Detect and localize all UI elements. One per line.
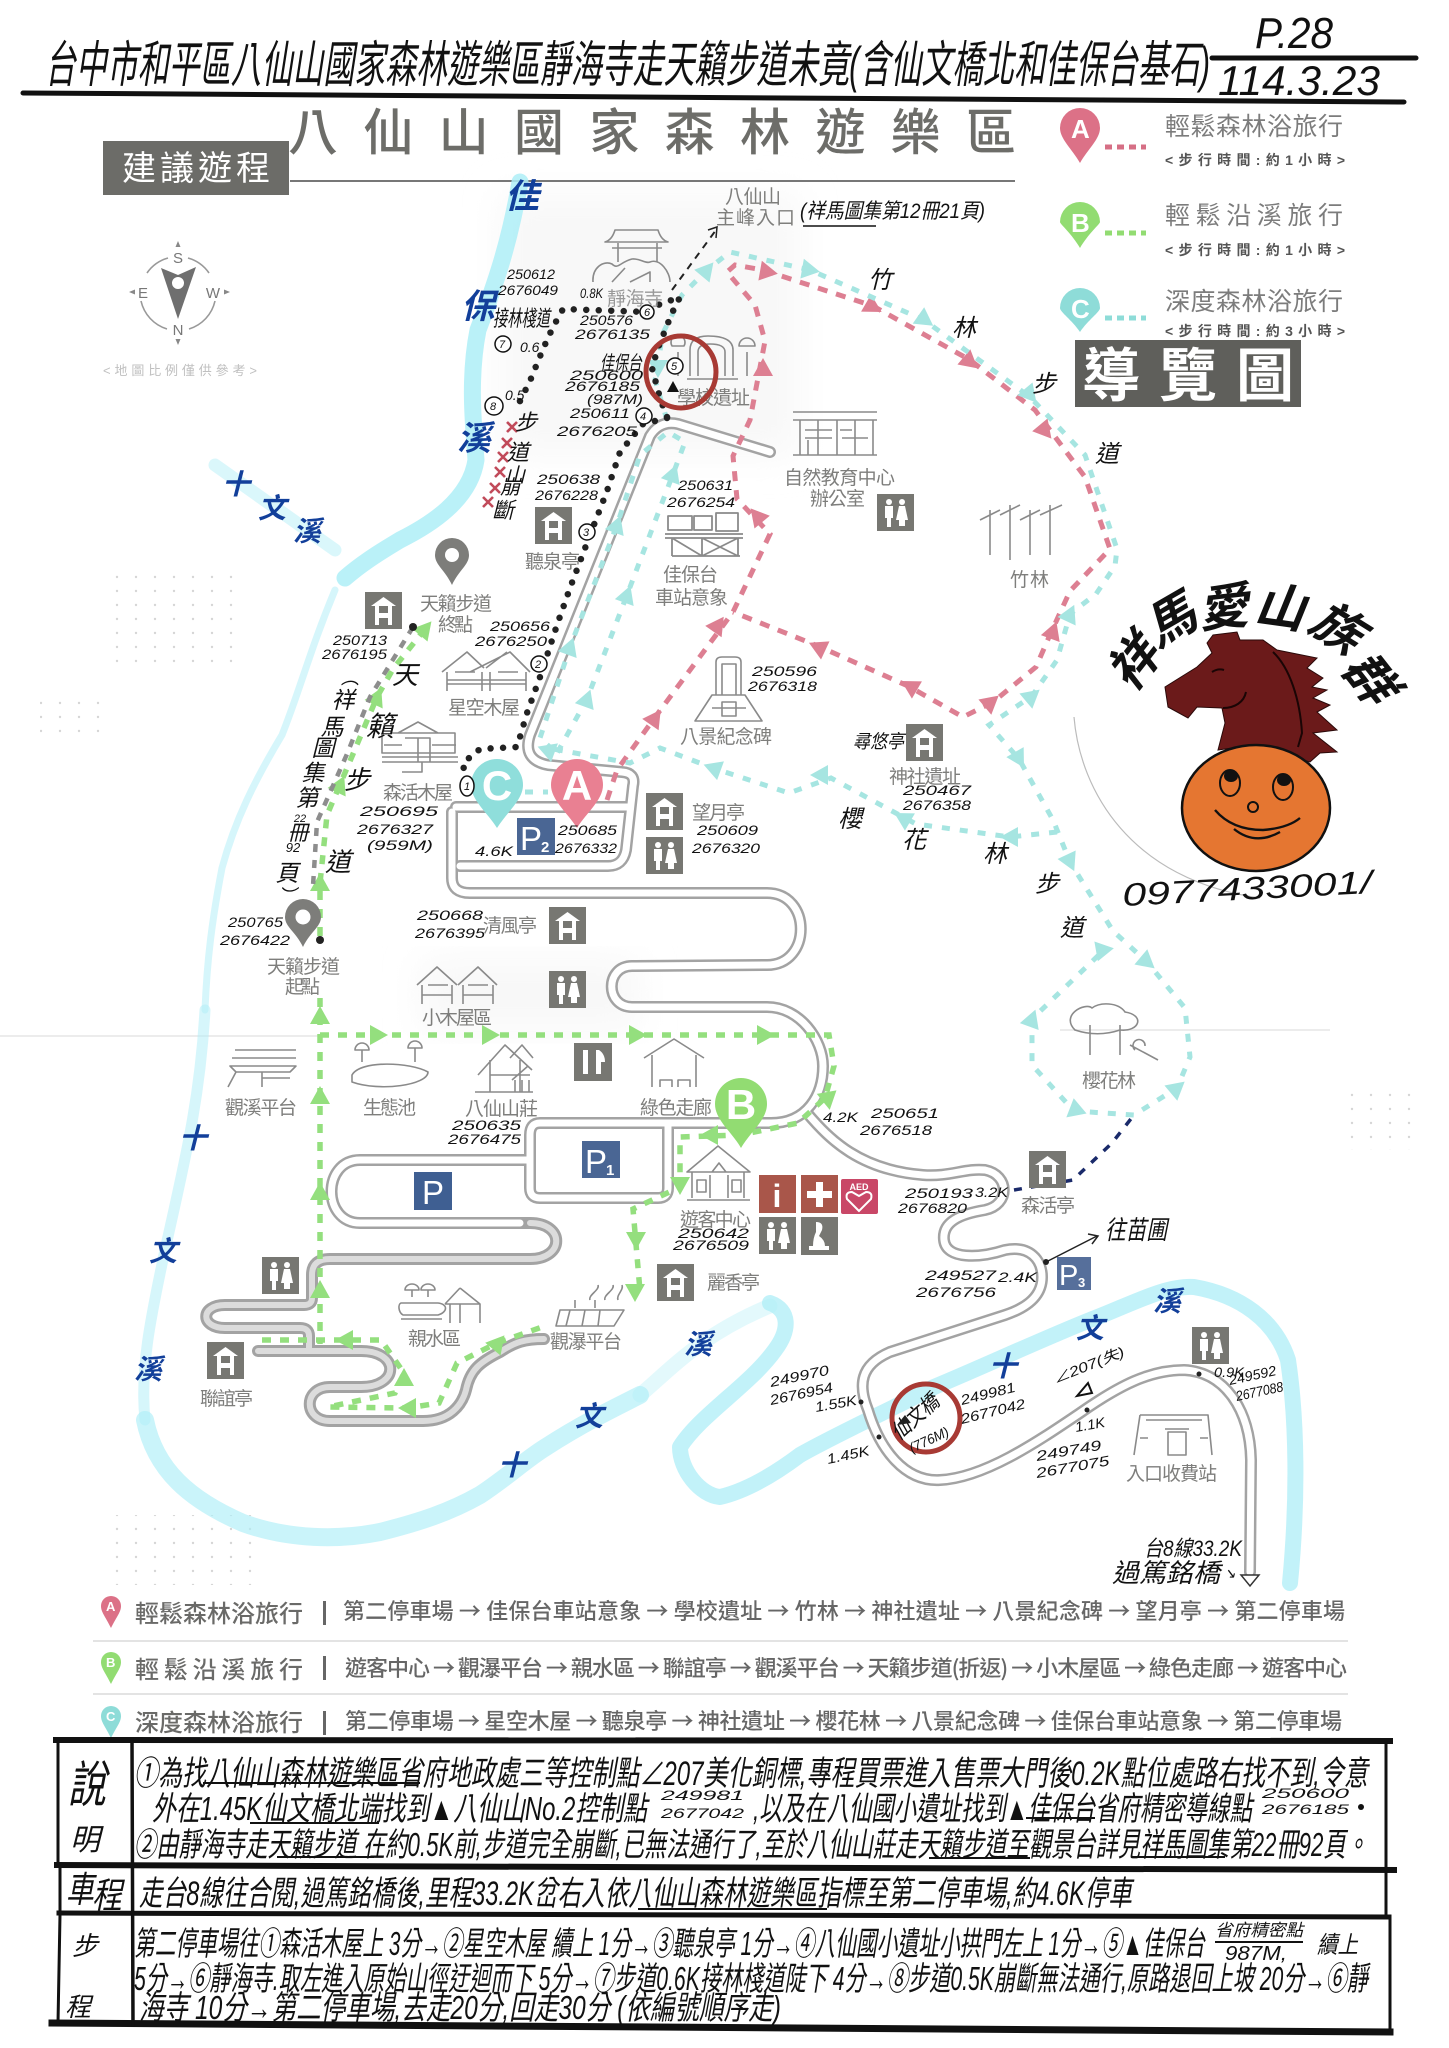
illustration: visitor center <box>687 1146 750 1200</box>
legend B: <步行時間:約1小時> <box>1165 242 1345 258</box>
map labels: 八景紀念碑 <box>680 725 772 748</box>
illustration: nature education center <box>793 412 877 455</box>
row label: notes: 明 <box>70 1824 104 1857</box>
roads <box>206 423 1251 1572</box>
road end arrow <box>1241 1575 1259 1586</box>
handwritten notes: coordinates: 250638 <box>536 471 600 487</box>
handwritten notes: coordinates: 1.55K <box>814 1392 859 1415</box>
handwritten notes: coordinates: 2676395 <box>414 925 485 941</box>
route row A <box>93 1594 1348 1641</box>
pavilion and restroom icons <box>207 494 1229 1379</box>
map labels: 起點 <box>285 976 320 998</box>
map labels <box>200 186 1217 1485</box>
handwritten vertical notes: 第 <box>296 785 322 811</box>
handwritten vertical notes: 櫻 <box>838 806 865 833</box>
pin C <box>471 759 523 828</box>
grey pin: trail start <box>285 899 321 947</box>
map labels: 八仙山 <box>725 186 781 208</box>
waypoint numerals: 6 <box>644 307 651 319</box>
handwritten notes: coordinates: 0.9K <box>1214 1364 1245 1380</box>
map labels: 觀溪平台 <box>225 1097 297 1119</box>
logo text arc: 族 <box>1300 591 1379 669</box>
handwritten vertical notes: 斷 <box>492 498 517 523</box>
handwritten notes: coordinates: 250576 <box>579 312 633 328</box>
handwritten notes: coordinates: 2676254 <box>666 494 735 510</box>
map labels: 聯誼亭 <box>200 1388 253 1410</box>
notes text: 249981 <box>659 1787 744 1803</box>
map labels: 主峰入口 <box>716 207 795 229</box>
route row B: B <box>106 1655 115 1670</box>
river names: 溪 <box>457 420 496 458</box>
handwritten notes: coordinates: 250651 <box>870 1105 939 1121</box>
pin B: B <box>726 1081 756 1128</box>
logo text arc: 山 <box>1251 577 1312 640</box>
map labels: 生態池 <box>363 1097 416 1119</box>
handwritten notes: coordinates: 250695 <box>358 803 438 819</box>
handwritten vertical notes: 馬 <box>320 714 346 740</box>
map labels: 神社遺址 <box>889 766 961 788</box>
compass: N <box>173 322 183 339</box>
compass: E <box>138 285 148 302</box>
handwritten notes: coordinates: 2676049 <box>497 282 558 298</box>
compass: W <box>206 285 221 302</box>
river names: 溪 <box>134 1354 166 1385</box>
red crosses: broken trail <box>483 422 517 507</box>
river names: 保 <box>461 288 499 326</box>
page number handwritten: P.28 <box>1255 9 1333 58</box>
logo text arc: 群 <box>1332 641 1412 721</box>
parking P2: 2 <box>541 839 549 856</box>
pink route A <box>607 261 1110 800</box>
illustrations <box>228 230 1212 1455</box>
handwritten notes: coordinates: 249981 <box>958 1379 1017 1408</box>
map labels: 終點 <box>438 614 473 636</box>
handwritten vertical notes: 92 <box>286 840 301 855</box>
route row A: 第二停車場 → 佳保台車站意象 → 學校遺址 → 竹林 → 神社遺址 → 八景紀念碑 → 望月亭 → 第二停車場 <box>343 1594 1345 1626</box>
pin B <box>715 1078 767 1148</box>
illustration: forest cabin <box>382 722 458 772</box>
guide map box: 導覽圖 <box>1082 344 1294 409</box>
handwritten notes: coordinates: 2676509 <box>672 1237 749 1253</box>
row label: steps <box>65 1931 100 2022</box>
park name heading: 八仙山國家森林遊樂區 <box>288 93 1016 165</box>
legend B: 輕鬆沿溪旅行 <box>1165 202 1343 230</box>
pin C: C <box>482 762 512 809</box>
handwritten vertical notes: 山 <box>505 465 527 487</box>
river names: 文 <box>149 1236 181 1267</box>
row label: drive: 車 <box>66 1869 97 1910</box>
handwritten notes: coordinates: 250668 <box>416 907 483 923</box>
illustration: eco pond <box>352 1041 428 1087</box>
map labels: 森活木屋 <box>383 782 453 804</box>
handwritten vertical notes: ︵ <box>341 668 359 688</box>
handwritten notes: coordinates: 1.1K <box>1074 1414 1107 1435</box>
statue icon <box>801 1217 838 1255</box>
route row B: 輕鬆沿溪旅行 <box>135 1650 303 1685</box>
notes text: 外在1.45K仙文橋北端找到▲八仙山No.2控制點 <box>152 1790 650 1827</box>
river names: 十 <box>498 1450 529 1481</box>
handwritten notes: coordinates: 250193 <box>904 1185 973 1201</box>
parking P2 <box>517 818 555 857</box>
title rules <box>23 58 1416 102</box>
row label: notes: 說 <box>68 1757 111 1813</box>
map labels: 麗香亭 <box>707 1272 760 1294</box>
handwritten notes: coordinates: 2676820 <box>897 1200 967 1216</box>
handwritten vertical notes: 祥 <box>332 687 358 713</box>
route row C: C <box>106 1709 116 1724</box>
route row B: 遊客中心 → 觀瀑平台 → 親水區 → 聯誼亭 → 觀溪平台 → 天籟步道(折返) → 小木屋區 → 綠色走廊 → 遊客中心 <box>345 1651 1347 1683</box>
route row B <box>93 1650 1348 1694</box>
parking P3: 3 <box>1078 1275 1085 1290</box>
legend A: 輕鬆森林浴旅行 <box>1165 113 1343 141</box>
map labels: 綠色走廊 <box>640 1097 712 1119</box>
illustration: villa <box>475 1045 533 1092</box>
waypoint numerals: 5 <box>671 361 678 373</box>
handwritten vertical notes: 道 <box>507 440 532 465</box>
river names: 溪 <box>293 516 325 547</box>
map labels: 櫻花林 <box>1082 1070 1136 1092</box>
handwritten notes: coordinates: 2676332 <box>554 840 617 856</box>
notes text: 2676185 <box>1260 1801 1349 1817</box>
handwritten vertical notes: 步 <box>1032 371 1058 398</box>
river names: 溪 <box>684 1329 716 1360</box>
black dotted hike route <box>316 297 680 944</box>
row label: drive <box>66 1869 125 1916</box>
steps text: 987M, <box>1225 1943 1287 1965</box>
parking P3 <box>1057 1257 1091 1292</box>
map labels: 車站意象 <box>655 587 728 609</box>
handwritten notes: coordinates: 過篤銘橋 <box>1112 1558 1224 1588</box>
handwritten notes: coordinates: 250609 <box>696 822 758 838</box>
handwritten vertical notes: 尋悠亭 <box>853 731 907 753</box>
parking P2: P <box>520 820 542 857</box>
red circles on survey points <box>646 336 960 1452</box>
handwritten notes: coordinates: 2676205 <box>556 423 637 439</box>
map labels: 清風亭 <box>483 915 537 937</box>
suggested itinerary box <box>103 141 289 195</box>
handwritten notes: coordinates: 250631 <box>677 477 733 493</box>
handwritten vertical notes: 頁 <box>276 860 302 886</box>
handwritten vertical notes: ︶ <box>278 886 300 906</box>
handwritten notes: coordinates: 250611 <box>569 405 630 421</box>
handwritten vertical notes <box>276 267 1122 942</box>
phone number: 0977433001/ <box>1121 864 1377 913</box>
handwritten notes: coordinates: 250765 <box>227 914 283 930</box>
handwritten vertical notes: 250467 <box>902 782 973 798</box>
handwritten vertical notes: 步 <box>344 765 372 795</box>
legend C: C <box>1071 294 1090 324</box>
illustration: school arch <box>671 335 755 379</box>
handwritten notes: coordinates: 4.2K <box>823 1109 859 1125</box>
logo text arc: 祥 <box>1096 621 1176 701</box>
illustration: cherry trees <box>1070 1004 1158 1060</box>
river names: 文 <box>575 1401 607 1432</box>
map labels: 星空木屋 <box>448 697 520 719</box>
steps text: 海寺 10分→第二停車場,去走20分,回走30分 (依編號順序走) <box>139 1989 781 2026</box>
waypoint numerals: 7 <box>499 339 506 351</box>
handwritten notes: coordinates: 2676185 <box>564 378 640 394</box>
handwritten notes: coordinates: 249527 <box>923 1267 998 1283</box>
handwritten notes: coordinates: 4.6K <box>475 843 514 859</box>
green route B <box>262 615 840 1418</box>
parking P1: P <box>585 1143 607 1180</box>
info icon <box>759 1175 796 1214</box>
handwritten notes: coordinates: 250656 <box>489 618 550 634</box>
map labels: 聽泉亭 <box>525 551 580 573</box>
handwritten notes: coordinates: 2676518 <box>859 1122 932 1138</box>
parking P <box>414 1172 452 1211</box>
map labels: 遊客中心 <box>680 1209 751 1231</box>
waypoint numerals: 2 <box>534 659 541 671</box>
map labels: 天籟步道 <box>267 956 340 978</box>
handwritten notes: coordinates: 2677042 <box>958 1395 1027 1427</box>
map labels: 天籟步道 <box>420 593 492 615</box>
handwritten notes: coordinates: 250713 <box>332 632 387 648</box>
dark blue dashed road <box>1014 1115 1134 1190</box>
handwritten notes: coordinates: ∠207(失) <box>1050 1343 1127 1387</box>
handwritten vertical notes: 步 <box>515 410 539 435</box>
logo text arc: 馬 <box>1135 582 1210 658</box>
handwritten notes: coordinates: 2677088 <box>1233 1378 1285 1404</box>
handwritten notes: coordinates: 250635 <box>451 1117 521 1133</box>
notes text <box>134 1755 1370 1863</box>
handwritten vertical notes: 林 <box>952 315 979 342</box>
steps text: 續上 <box>1317 1932 1359 1959</box>
illustration: star cabins <box>442 652 530 691</box>
map labels: 森活亭 <box>1021 1195 1075 1217</box>
notes text: 250600 <box>1260 1785 1349 1801</box>
parking P1 <box>582 1141 620 1180</box>
waypoint numerals: 8 <box>490 401 497 413</box>
handwritten notes: coordinates: 2676954 <box>767 1379 834 1408</box>
handwritten notes: coordinates: 2676318 <box>747 678 817 694</box>
map labels: 竹林 <box>1010 569 1049 591</box>
route row C: 第二停車場 → 星空木屋 → 聽泉亭 → 神社遺址 → 櫻花林 → 八景紀念碑 → 佳保台車站意象 → 第二停車場 <box>345 1704 1342 1736</box>
legend A: A <box>1071 114 1090 144</box>
illustration: toll station <box>1134 1415 1212 1455</box>
first aid icon <box>801 1175 838 1213</box>
handwritten notes: coordinates: 佳保台 <box>600 353 643 375</box>
illustration: monument <box>695 657 762 721</box>
steps text: 省府精密點 <box>1215 1921 1305 1940</box>
handwritten notes: coordinates: 2676195 <box>321 646 387 662</box>
waypoint numerals: 1 <box>464 781 470 793</box>
waypoint numerals: 3 <box>583 527 590 539</box>
handwritten vertical notes: 天 <box>392 660 421 690</box>
handwritten notes: coordinates: 250685 <box>557 822 617 838</box>
row label: steps: 程 <box>65 1992 94 2022</box>
handwritten notes: coordinates: 249749 <box>1033 1437 1103 1464</box>
legend B <box>1060 202 1345 258</box>
info icon: i <box>773 1178 781 1214</box>
parking P: P <box>422 1174 444 1211</box>
handwritten notes: coordinates: 2676250 <box>474 633 547 649</box>
notes table frame <box>52 1740 1394 2032</box>
suggested itinerary box: 建議遊程 <box>122 150 270 188</box>
river names: 佳 <box>505 178 543 216</box>
handwritten notes: coordinates: 249592 <box>1226 1362 1278 1388</box>
legend C: 深度森林浴旅行 <box>1165 288 1343 316</box>
map labels: 靜海寺 <box>607 288 663 310</box>
handwritten notes: coordinates: 2.4K <box>997 1269 1038 1285</box>
handwritten vertical notes: 花 <box>902 827 929 854</box>
river names: 文 <box>1076 1313 1108 1344</box>
handwritten notes: coordinates: (祥馬圖集第12冊21頁) <box>800 200 985 223</box>
numbered route waypoints <box>460 305 683 796</box>
handwritten notes: coordinates: 2676422 <box>219 932 290 948</box>
compass <box>129 241 230 345</box>
handwritten notes: coordinates: (776M) <box>907 1423 951 1456</box>
route row A: A <box>106 1599 116 1614</box>
handwritten notes: coordinates <box>219 200 1285 1588</box>
handwritten notes: coordinates: (959M) <box>367 837 433 853</box>
illustration: log cabins <box>417 967 497 1004</box>
legend B: B <box>1071 208 1090 238</box>
map labels: 辦公室 <box>810 488 865 510</box>
row label: notes <box>68 1757 111 1857</box>
handwritten notes: coordinates: 0.8K <box>580 285 604 301</box>
handwritten notes: coordinates: 仙文橋 <box>887 1388 946 1445</box>
map labels: 八仙山莊 <box>465 1098 538 1120</box>
river names: 溪 <box>1153 1286 1185 1317</box>
logo text arc <box>1096 577 1412 721</box>
handwritten vertical notes: 步 <box>1035 871 1061 898</box>
river names: 十 <box>989 1351 1020 1382</box>
handwritten notes: coordinates: 接林棧道 <box>493 306 552 331</box>
map labels: 入口收費站 <box>1126 1463 1217 1485</box>
handwritten vertical notes: 道 <box>1095 441 1122 468</box>
illustration: railway station <box>665 513 743 556</box>
route row A: 輕鬆森林浴旅行 <box>135 1594 303 1629</box>
dining icon <box>574 1043 612 1081</box>
map labels: 觀瀑平台 <box>550 1331 622 1353</box>
compass: S <box>173 250 183 267</box>
legend C: <步行時間:約3小時> <box>1165 323 1345 339</box>
handwritten vertical notes: 林 <box>983 841 1010 868</box>
pin A: A <box>562 762 592 809</box>
AED icon: AED <box>849 1182 869 1192</box>
handwritten notes: coordinates: 3.2K <box>975 1184 1009 1200</box>
river: marker stream <box>144 182 1295 1583</box>
illustration: green corridor <box>644 1039 704 1087</box>
river names: 文 <box>258 493 290 524</box>
cyan route C <box>525 252 1191 1125</box>
handwritten vertical notes: 22 <box>293 813 306 825</box>
parking P3: P <box>1059 1260 1078 1292</box>
handwritten notes: coordinates: 1.45K <box>825 1442 871 1467</box>
handwritten notes: coordinates: 250612 <box>506 266 555 282</box>
steps text <box>134 1921 1371 2026</box>
map labels: 學校遺址 <box>677 387 750 409</box>
illustration: temple gate <box>593 230 670 282</box>
handwritten notes: coordinates: 2676135 <box>574 326 650 342</box>
row label: drive: 程 <box>92 1875 125 1916</box>
illustration: stream platform <box>228 1050 296 1087</box>
map labels: 望月亭 <box>692 802 745 824</box>
illustration: waterfall platform <box>556 1285 624 1326</box>
handwritten notes: coordinates: 往苗圃 <box>1105 1215 1170 1245</box>
handwritten notes: coordinates: 2676228 <box>534 487 598 503</box>
legend A <box>1060 108 1345 168</box>
notes text: 2677042 <box>659 1805 744 1821</box>
waypoint numerals <box>464 307 678 793</box>
grey pin: trail end <box>435 538 469 585</box>
map scale note: <地圖比例僅供參考> <box>103 363 257 378</box>
map labels: 小木屋區 <box>422 1007 492 1029</box>
map labels: 親水區 <box>408 1328 461 1350</box>
row label: steps: 步 <box>72 1931 100 1961</box>
handwritten notes: coordinates: 0.6 <box>520 339 540 355</box>
handwritten vertical notes: 集 <box>302 760 326 786</box>
route row C: 深度森林浴旅行 <box>135 1703 303 1738</box>
handwritten vertical notes: 竹 <box>868 267 895 294</box>
handwritten vertical notes: 冊 <box>288 822 310 845</box>
AED icon <box>841 1179 878 1214</box>
handwritten notes: coordinates: 台8線33.2K <box>1144 1536 1243 1561</box>
river names: 十 <box>179 1123 210 1154</box>
logo text arc: 愛 <box>1195 577 1256 638</box>
handwritten notes: coordinates: ↘ <box>1224 1565 1236 1581</box>
map labels: 自然教育中心 <box>784 467 895 489</box>
handwritten notes: coordinates: 2676327 <box>356 821 435 837</box>
handwritten notes: coordinates: 2676475 <box>447 1131 521 1147</box>
handwritten notes: coordinates: 2676756 <box>915 1284 996 1300</box>
waypoint numerals: 4 <box>640 411 646 423</box>
handwritten notes: coordinates: (987M) <box>587 391 643 407</box>
handwritten notes: coordinates: 250642 <box>676 1225 749 1241</box>
handwritten vertical notes: 道 <box>1060 915 1087 942</box>
illustration: bamboo <box>980 505 1062 560</box>
legend A: <步行時間:約1小時> <box>1165 152 1345 168</box>
handwritten notes: coordinates: 249970 <box>767 1362 831 1390</box>
handwritten notes: coordinates: 0.5 <box>505 387 525 403</box>
parking P1: 1 <box>606 1162 614 1179</box>
handwritten notes: coordinates: 250596 <box>751 663 817 679</box>
grey dashed trail <box>313 627 413 886</box>
handwritten vertical notes: 2676358 <box>902 797 971 813</box>
handwritten notes: coordinates: 2676320 <box>691 840 760 856</box>
handwritten notes: coordinates: 250600 <box>568 367 643 383</box>
handwritten vertical notes: 道 <box>325 847 355 877</box>
handwritten vertical notes: 崩 <box>500 477 522 499</box>
map labels: 佳保台 <box>663 564 718 586</box>
handwritten vertical notes: 圖 <box>312 735 338 761</box>
logo: horse and smiling ball <box>1074 632 1337 898</box>
handwritten vertical notes: 籟 <box>366 711 399 742</box>
illustration: water play <box>399 1284 480 1323</box>
pin A <box>551 759 603 828</box>
legend C <box>1060 288 1345 339</box>
river names: 十 <box>222 469 253 500</box>
river names <box>134 178 1185 1481</box>
date: 114.3.23 <box>1218 57 1380 104</box>
handwritten notes: coordinates: 2677075 <box>1033 1452 1111 1481</box>
